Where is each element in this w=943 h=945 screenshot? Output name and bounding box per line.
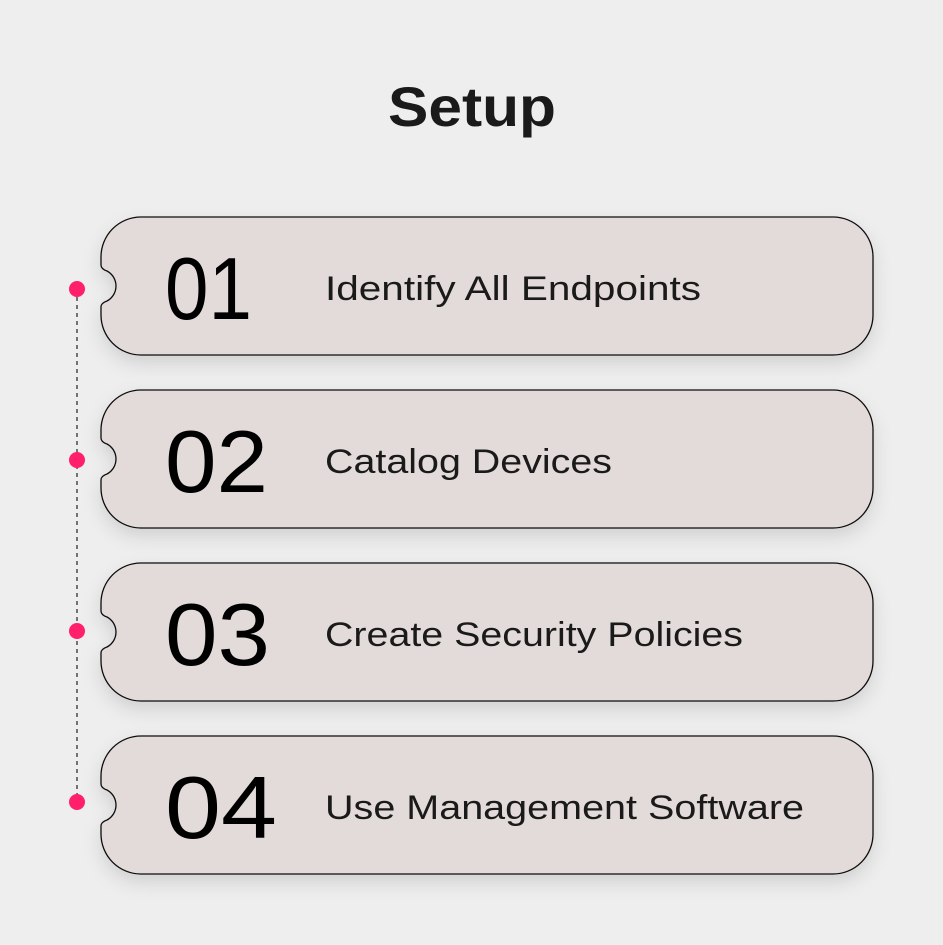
label 3: Create Security Policies bbox=[325, 616, 743, 654]
card 1 bbox=[101, 217, 873, 355]
label 1: Identify All Endpoints bbox=[325, 270, 701, 308]
timeline dots bbox=[69, 281, 85, 810]
label 2: Catalog Devices bbox=[325, 443, 612, 481]
number 01: 01 bbox=[165, 239, 252, 338]
timeline dashed line bbox=[76, 289, 78, 802]
card 3 bbox=[101, 563, 873, 701]
title: Setup bbox=[388, 75, 556, 138]
card 2 bbox=[101, 390, 873, 528]
number 04: 04 bbox=[165, 758, 277, 857]
label 4: Use Management Software bbox=[325, 789, 804, 827]
number 02: 02 bbox=[165, 412, 268, 511]
number 03: 03 bbox=[165, 585, 270, 684]
card 4 bbox=[101, 736, 873, 874]
